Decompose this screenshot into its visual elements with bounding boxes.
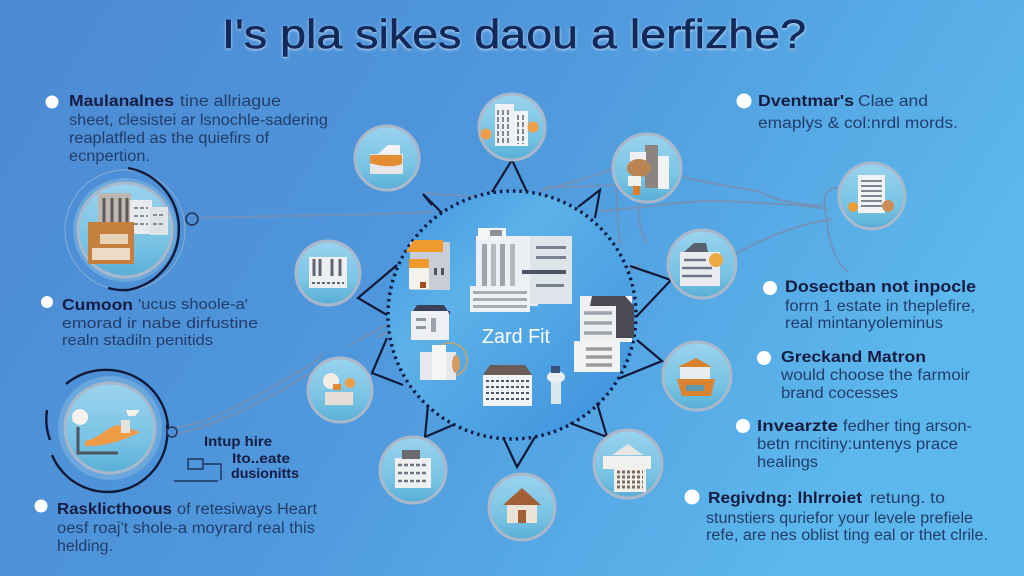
- text block: left 1: [46, 93, 328, 165]
- text block: right 1: Clae and: [858, 93, 928, 110]
- text block: left 1: ecnpertion.: [69, 148, 150, 165]
- text block: left 3: helding.: [57, 538, 113, 555]
- text block: right 5: refe, are nes oblist ting eal or thet clrile.: [706, 527, 988, 544]
- text block: right 2: Dosectban not inpocle: [785, 278, 976, 296]
- text block: left 1: Maulanalnes: [69, 93, 174, 110]
- text block: right 1: emaplys & col:nrdl mords.: [758, 115, 958, 132]
- text block: right 2: forrn 1 estate in theplefire,: [785, 298, 975, 315]
- node: lower left, apartment: [380, 437, 446, 503]
- text block: right 4: healings: [757, 454, 818, 471]
- text block: right 1: Dventmar's: [758, 93, 854, 110]
- hub icon: right building: [574, 296, 634, 372]
- node: top, office towers: [479, 94, 545, 160]
- node: lower right, checked facade: [594, 430, 662, 498]
- node: left, grey office: [296, 241, 360, 305]
- node: right, townhouse: [668, 230, 736, 298]
- text block: left 3: of retesiways Heart: [177, 501, 318, 518]
- text block: right 3: would choose the farmoir: [780, 367, 970, 384]
- text block: right 5: stunstiers quriefor your levele prefiele: [706, 510, 973, 527]
- text block: left 2: 'ucus shoole-a': [138, 297, 248, 313]
- title: I's pla sikes daou a lerfizhe?: [222, 12, 806, 58]
- text block: left 2: [41, 296, 258, 349]
- text block: right 3: [757, 349, 970, 402]
- text block: left 3: [34, 500, 318, 555]
- text block: right 4: Invearzte: [757, 418, 838, 435]
- large node: city block: [65, 168, 198, 290]
- node: far right, document: [839, 163, 905, 229]
- small callout: desk diagram: Intup hire: [204, 434, 273, 449]
- text block: left 2: emorad ir nabe dirfustine: [62, 315, 258, 332]
- node: right lower, orange house: [663, 342, 731, 410]
- text block: left 1: tine allriague: [180, 93, 281, 110]
- node: bottom, brick house: [489, 474, 555, 540]
- hub icon: main building: [470, 228, 572, 312]
- text block: left 1: sheet, clesistei ar lsnochle-sadering: [69, 112, 328, 129]
- text block: right 1: [736, 93, 958, 132]
- text block: right 5: retung. to: [870, 490, 945, 507]
- node: upper right, building with figure: [613, 134, 681, 202]
- text block: left 3: Rasklicthoous: [57, 501, 172, 518]
- node: upper left, open envelope: [355, 126, 419, 190]
- hub label: Zard Fit: [482, 326, 550, 348]
- hub icon: small house: [411, 305, 450, 340]
- small callout: desk diagram: [174, 434, 299, 481]
- text block: right 4: fedher ting arson-: [843, 418, 972, 435]
- hub icon: orange roof building: [406, 240, 450, 290]
- spikes linking hub to nodes: [358, 160, 671, 467]
- hub icon: small tower: [547, 366, 565, 404]
- node: left lower, desk: [308, 358, 372, 422]
- text block: right 3: Greckand Matron: [781, 349, 926, 366]
- hub icon: calendar building: [483, 365, 532, 406]
- connector wires: [172, 167, 848, 434]
- central hub circle: [388, 191, 636, 439]
- text block: right 2: real mintanyoleminus: [785, 315, 943, 332]
- text block: left 1: reaplatfled as the quiefirs of: [69, 130, 270, 147]
- text block: right 4: [736, 418, 972, 471]
- small callout: desk diagram: dusionitts: [231, 466, 299, 481]
- title: I's pla sikes daou a lerfizhe?: [222, 11, 806, 57]
- small callout: desk diagram: Ito..eate: [232, 451, 291, 466]
- text block: right 2: [763, 278, 976, 332]
- hub icon: device: [420, 343, 467, 380]
- text block: left 3: oesf roaj't shole-a moyrard real this: [57, 520, 315, 537]
- text block: left 2: realn stadiln penitids: [62, 332, 213, 349]
- text block: right 4: betn rncitiny:untenys prace: [757, 436, 958, 453]
- text block: right 5: Regivdng: lhlrroiet: [708, 490, 863, 507]
- large node: lamp and desk: [46, 370, 177, 492]
- text block: left 2: Cumoon: [62, 297, 133, 314]
- text block: right 3: brand cocesses: [781, 385, 898, 402]
- text block: right 5: [684, 490, 988, 544]
